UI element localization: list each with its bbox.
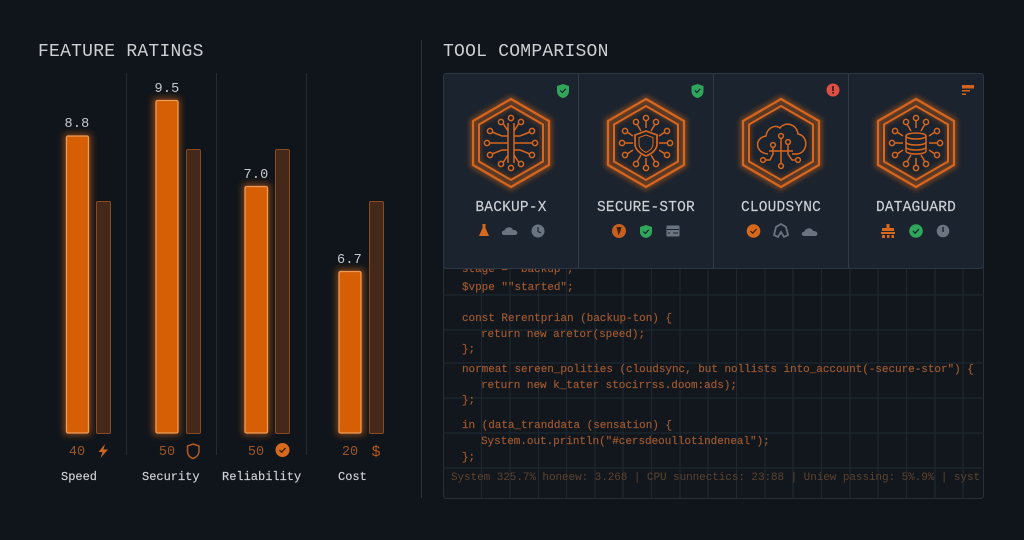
code lines: in (data_tranddata (sensation) { (462, 420, 672, 432)
card: backup-x (473, 84, 569, 238)
card: dataguard: DATAGUARD (876, 200, 956, 216)
panel: tool cards (444, 74, 984, 268)
code lines: $vppe ""started"; (462, 282, 574, 294)
bar group: security (142, 82, 200, 484)
icon: orange bars status (962, 85, 974, 95)
icon row (479, 224, 544, 238)
icon row (881, 224, 949, 238)
icon row (612, 224, 680, 238)
icon row (747, 224, 817, 238)
heading: feature ratings: FEATURE RATINGS (38, 42, 204, 62)
code lines (462, 264, 974, 464)
bar group: cost: 6.7 (337, 253, 362, 268)
bar group: cost (337, 202, 384, 484)
card: cloudsync (741, 84, 840, 238)
bar group: reliability: 50 (248, 445, 264, 460)
code lines: }; (462, 344, 475, 356)
bar group: security: 9.5 (155, 82, 179, 97)
status bar: System 325.7% honeew: 3.268 | CPU sunnectics: 23:88 | Uniew passing: 5%.9% | syst (451, 472, 980, 484)
bar group: speed: Speed (61, 470, 97, 484)
icon: hexagon shield (608, 99, 684, 187)
code lines: System.out.println("#cersdeoullotindeneal"); (481, 436, 770, 448)
card: secure-stor (597, 84, 704, 238)
card: cloudsync: CLOUDSYNC (741, 200, 821, 216)
bar group: security: 50 (159, 445, 175, 460)
bar group: reliability: Reliability (222, 470, 301, 484)
icon: hexagon cloud (743, 99, 819, 187)
icon: green shield status (557, 84, 569, 98)
bar group: cost: 20 (342, 445, 358, 460)
code lines: const Rerentprian (backup-ton) { (462, 313, 672, 325)
code lines: stage = "backup"; (462, 264, 574, 276)
icon: hexagon circuit (473, 99, 549, 187)
code lines: }; (462, 395, 475, 407)
bar group: speed (61, 117, 110, 484)
bar group: speed: 8.8 (65, 117, 89, 132)
icon: red alert status (826, 84, 840, 96)
icon: green shield status (692, 84, 704, 98)
bar group: security: Security (142, 470, 200, 484)
bar group: speed: 40 (69, 445, 85, 460)
panel: feature ratings bar chart (61, 73, 384, 484)
code lines: }; (462, 452, 475, 464)
bar group: cost: $ (371, 444, 381, 461)
bar group: reliability: 7.0 (244, 168, 268, 183)
code lines: return new k_tater stocirrss.doom:ads); (481, 380, 737, 392)
card: secure-stor: SECURE-STOR (597, 200, 695, 216)
card: backup-x: BACKUP-X (475, 200, 547, 216)
code lines: normeat sereen_polities (cloudsync, but nollists into_account(-secure-stor") { (462, 364, 974, 376)
bar group: reliability (222, 150, 301, 484)
bar group: cost: Cost (338, 470, 367, 484)
icon: hexagon database (878, 99, 954, 187)
heading: tool comparison: TOOL COMPARISON (443, 42, 609, 62)
card: dataguard (876, 85, 974, 238)
panel: code terminal (443, 264, 984, 498)
code lines: return new aretor(speed); (481, 329, 645, 341)
